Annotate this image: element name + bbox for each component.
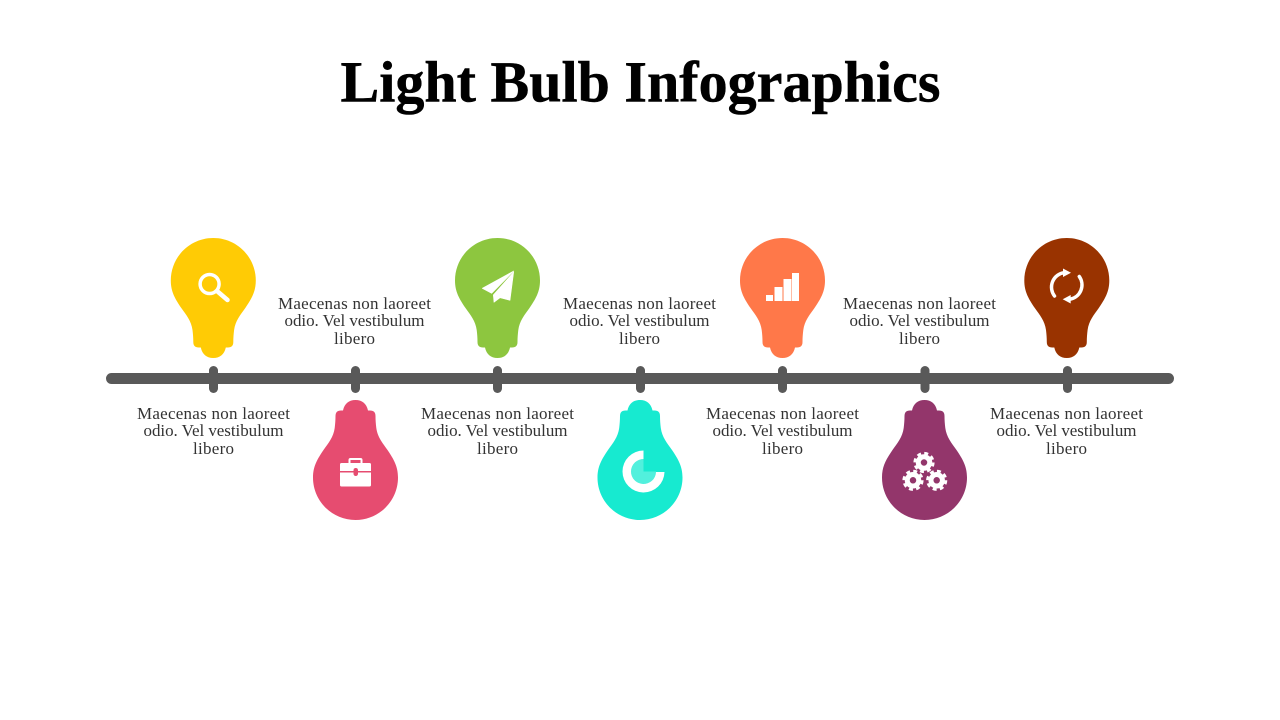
icon: donut chart — [623, 450, 664, 493]
text: bottom 2: Maecenas non laoreet — [421, 404, 574, 423]
text: bottom 1: Maecenas non laoreet — [137, 404, 290, 423]
text: top 2: libero — [619, 329, 660, 348]
text: top 1 — [278, 294, 431, 348]
text: top 1: libero — [334, 329, 375, 348]
bulb 2: pink briefcase — [313, 400, 398, 520]
title: Light Bulb Infographics — [340, 50, 940, 114]
text: bottom 2: libero — [477, 439, 518, 458]
text: bottom 4: libero — [1046, 439, 1087, 458]
icon: bars — [766, 273, 799, 301]
bulb 7: brown refresh — [1024, 238, 1109, 358]
text: bottom 2: odio. Vel vestibulum — [428, 421, 568, 440]
text: top 3: Maecenas non laoreet — [843, 294, 996, 313]
text: top 2 — [563, 294, 716, 348]
text: bottom 1 — [137, 404, 290, 458]
text: bottom 4 — [990, 404, 1143, 458]
text: top 1: Maecenas non laoreet — [278, 294, 431, 313]
text: top 3: odio. Vel vestibulum — [850, 311, 990, 330]
text: top 2: Maecenas non laoreet — [563, 294, 716, 313]
bulb 4: teal donut — [598, 400, 682, 520]
icon: paper plane — [482, 271, 514, 302]
icon: gears — [904, 453, 946, 490]
bulb 6: purple gears — [882, 400, 967, 520]
text: bottom 1: odio. Vel vestibulum — [144, 421, 284, 440]
text: bottom 1: libero — [193, 439, 234, 458]
bulb 5: orange bar chart — [740, 238, 825, 358]
icon: magnifier — [200, 274, 228, 300]
text: top 3: libero — [899, 329, 940, 348]
text: top 1: odio. Vel vestibulum — [284, 311, 424, 330]
timeline — [106, 366, 1174, 393]
text: bottom 3: libero — [762, 439, 803, 458]
bulb 3: green paper plane — [455, 238, 540, 358]
text: top 2: odio. Vel vestibulum — [570, 311, 710, 330]
bulb 1: yellow search — [171, 238, 256, 358]
text: bottom 3: odio. Vel vestibulum — [712, 421, 852, 440]
text: bottom 4: odio. Vel vestibulum — [996, 421, 1136, 440]
text: top 3 — [843, 294, 996, 348]
text: bottom 3 — [706, 404, 859, 458]
text: bottom 2 — [421, 404, 574, 458]
icon: briefcase — [340, 459, 371, 486]
icon: refresh arrows — [1052, 268, 1082, 304]
text: bottom 3: Maecenas non laoreet — [706, 404, 859, 423]
text: bottom 4: Maecenas non laoreet — [990, 404, 1143, 423]
